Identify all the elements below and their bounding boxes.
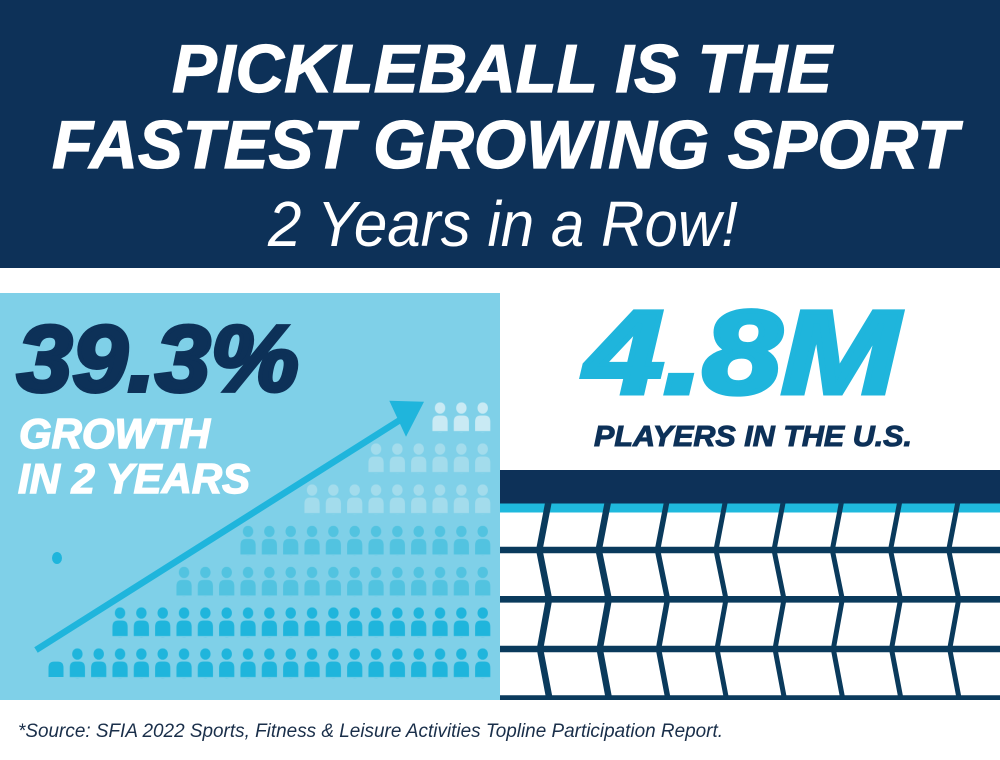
source note: *Source: SFIA 2022 Sports, Fitness & Leisure Activities Topline Participation Report. (18, 720, 723, 742)
net mesh (500, 503, 1000, 698)
panel: growth (0, 293, 500, 700)
row 2 (109, 607, 493, 637)
player count: 4.8M (583, 287, 902, 419)
dot (52, 552, 62, 564)
row 5 (301, 484, 493, 514)
pickleball net (500, 470, 1000, 700)
people rows chart (48, 402, 493, 678)
net top band (500, 470, 1000, 504)
header banner (0, 0, 1000, 268)
subtitle: 2 Years in a Row! (267, 188, 738, 260)
row 3 (173, 567, 493, 597)
row 4 (237, 526, 493, 556)
growth label line 1: GROWTH (19, 410, 212, 457)
row 6 (365, 443, 493, 473)
title line 1: PICKLEBALL IS THE (172, 31, 835, 107)
row 1 (48, 648, 493, 678)
growth percentage: 39.3% (17, 306, 299, 411)
growth label line 2: IN 2 YEARS (18, 455, 250, 502)
title line 2: FASTEST GROWING SPORT (52, 107, 963, 183)
player label: PLAYERS IN THE U.S. (594, 421, 912, 453)
net cyan stripe (500, 504, 1000, 512)
arrow (36, 401, 424, 650)
row 7 (429, 402, 493, 432)
